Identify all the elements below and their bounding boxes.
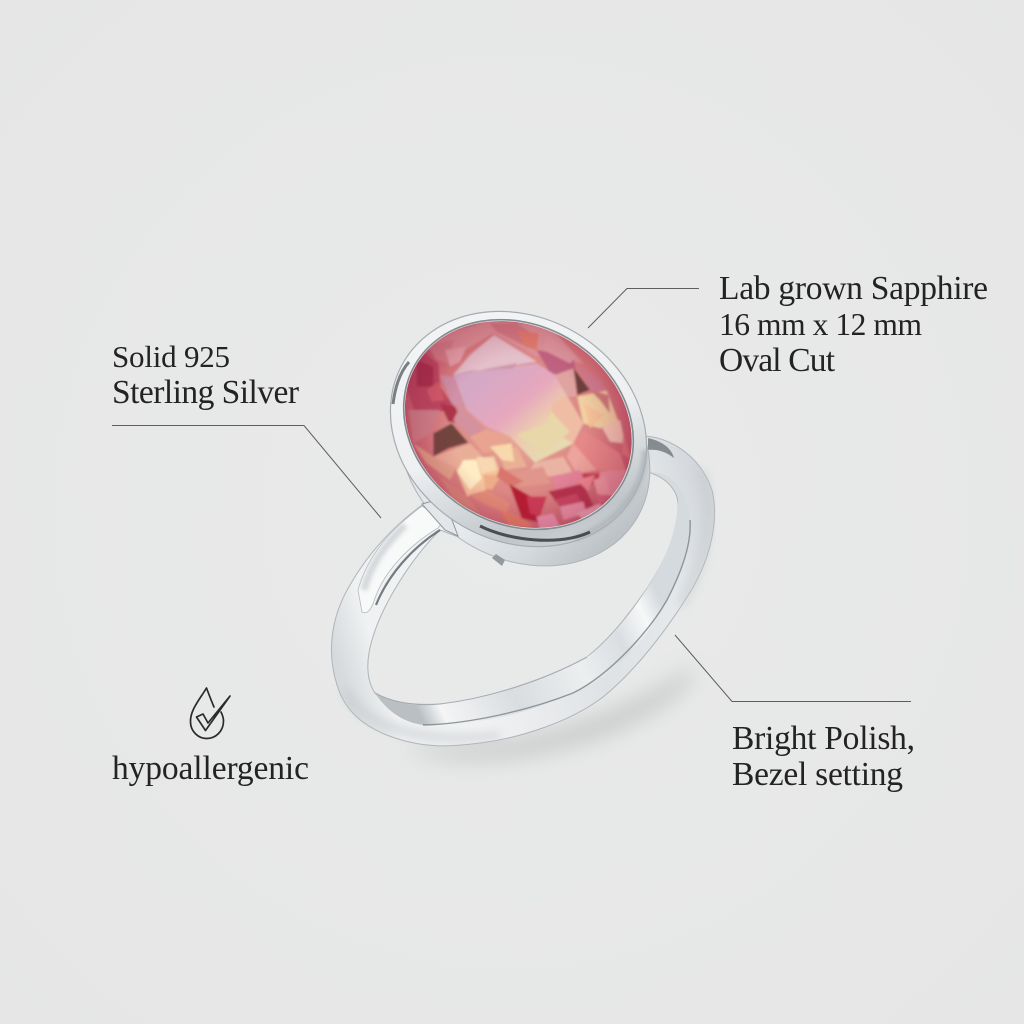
callout leader: sapphire	[588, 288, 699, 328]
brown shadow facet	[433, 423, 468, 457]
shoulder block	[422, 500, 458, 536]
bezel left dark reflection	[393, 362, 409, 404]
callout text: silver: Sterling Silver	[112, 374, 299, 411]
cast shadow	[400, 668, 693, 761]
upper table triangle	[453, 335, 537, 375]
central table	[453, 363, 573, 463]
left shank gray strip	[364, 525, 405, 590]
callout leader: polish	[675, 635, 911, 702]
cup small reflection	[492, 554, 505, 566]
inner band upper edge	[375, 657, 587, 705]
callout leader: silver	[112, 426, 381, 518]
icon: hypoallergenic drop with check	[190, 688, 230, 738]
ring illustration	[331, 266, 714, 761]
callout text: sapphire: 16 mm x 12 mm	[719, 307, 922, 342]
inner band surface	[375, 472, 690, 725]
warm highlight cluster	[490, 443, 514, 462]
bezel lower dark reflection	[480, 526, 590, 540]
right shank reflection	[648, 438, 674, 458]
label: hypoallergenic: hypoallergenic	[112, 750, 309, 787]
lower outer band shading	[345, 690, 500, 738]
inner band dark edge	[423, 520, 690, 725]
right lower pink facets	[576, 432, 626, 472]
callout text: polish: Bezel setting	[732, 756, 903, 793]
callout text: sapphire: Oval Cut	[719, 342, 836, 379]
gem edge shading	[405, 321, 632, 528]
lower peach facets	[469, 492, 508, 512]
gem base	[405, 321, 632, 528]
right outer band shading	[680, 470, 707, 605]
callout text: polish: Bright Polish,	[732, 720, 915, 757]
left lower peach	[413, 443, 457, 480]
table right peach	[548, 395, 583, 443]
callout text: silver: Solid 925	[112, 339, 230, 374]
upper crown facets	[434, 321, 582, 364]
left red facets	[407, 354, 454, 412]
left shank highlight	[358, 506, 444, 613]
callout text: polish	[732, 720, 915, 793]
deep red lower facets	[509, 484, 542, 523]
callout text: sapphire: Lab grown Sapphire	[719, 270, 988, 307]
bezel inner rim	[365, 279, 672, 570]
left shank reflection line	[376, 530, 440, 605]
sapphire gem	[405, 321, 632, 528]
bezel cup	[358, 293, 692, 611]
lower center facets	[530, 457, 573, 477]
bezel	[347, 266, 690, 592]
callout text: silver	[112, 339, 299, 411]
callout text: sapphire	[719, 270, 988, 379]
right upper facets	[555, 368, 577, 397]
ring band	[331, 436, 714, 746]
bezel right shading	[575, 450, 645, 538]
